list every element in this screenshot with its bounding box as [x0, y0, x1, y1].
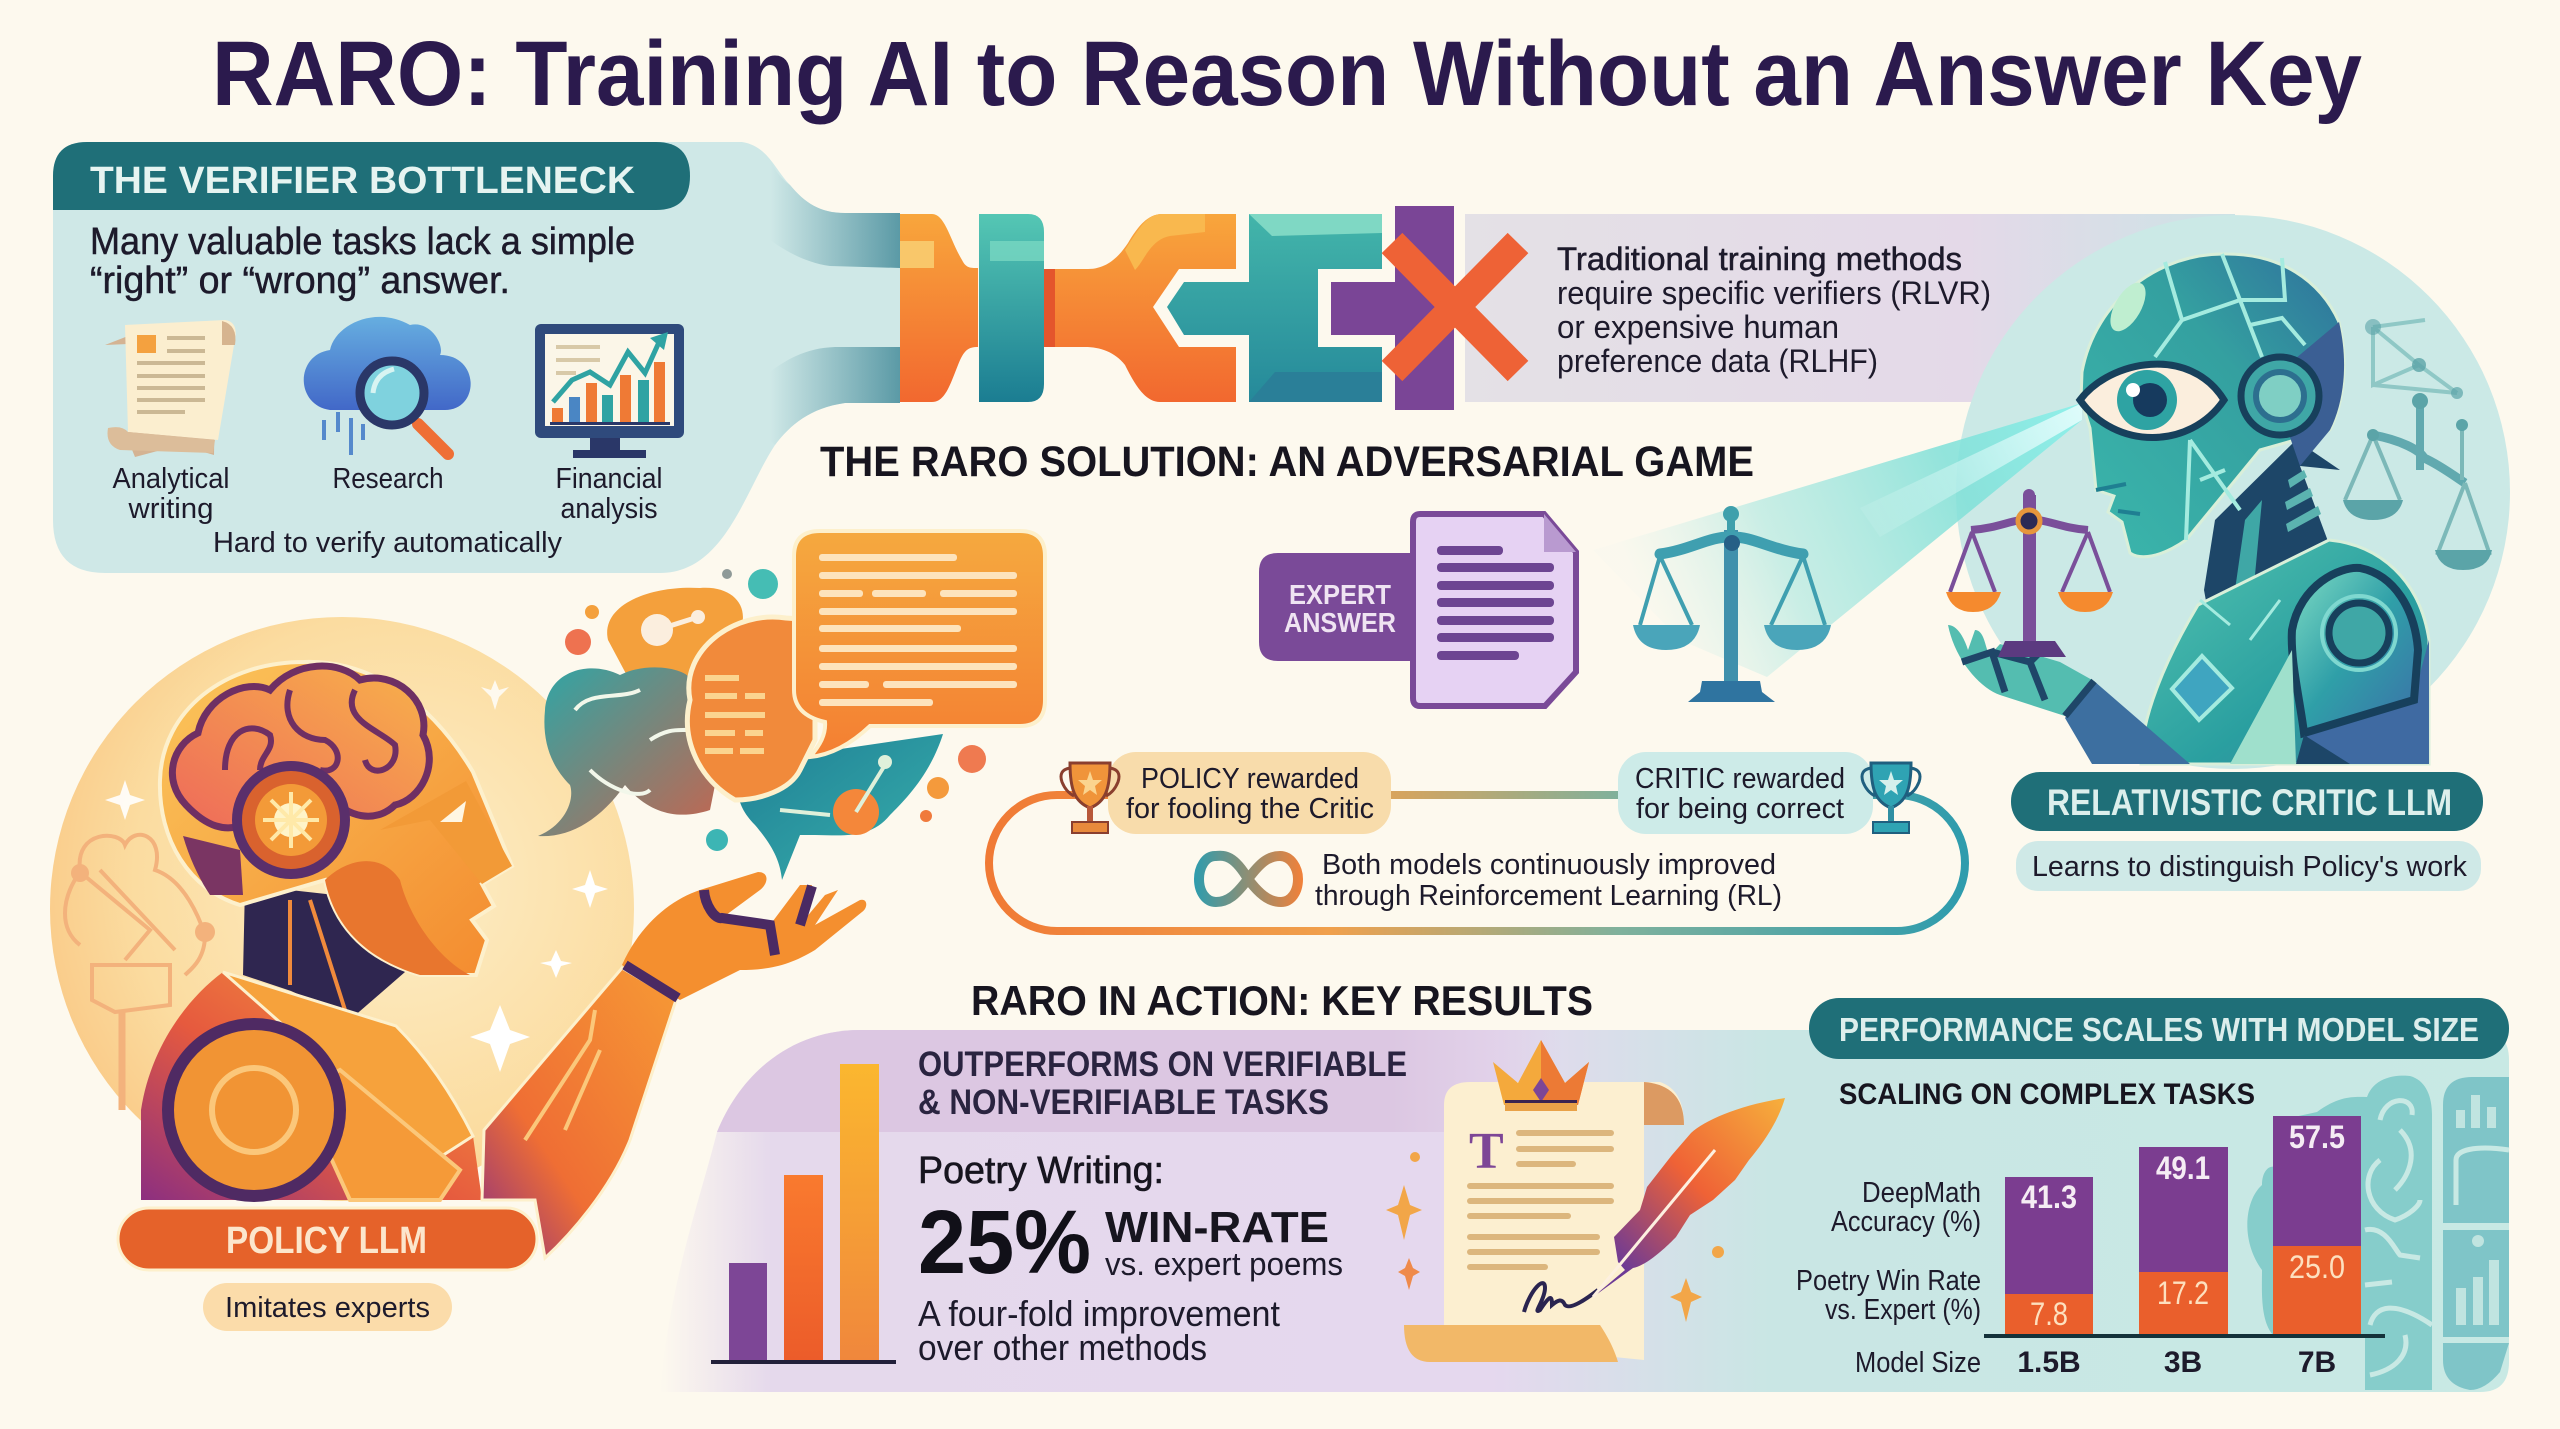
held scale: [1946, 489, 2113, 657]
critic reward pill: CRITIC rewarded: [1635, 763, 1845, 795]
model sizes: 1.5B: [2017, 1346, 2081, 1379]
axis labels: Model Size: [1855, 1347, 1981, 1379]
panel background with pipes: [53, 142, 900, 573]
hand: [622, 872, 866, 1000]
label: policy LLM: POLICY LLM: [226, 1220, 427, 1262]
faint network sketch: [65, 835, 205, 1110]
beam from critic eye: [1593, 403, 2082, 677]
model sizes: 3B: [2164, 1346, 2202, 1379]
label: financial: Financial: [556, 463, 662, 495]
bar 3B: 17.2: [2157, 1275, 2209, 1311]
stat label: WIN-RATE: [1105, 1203, 1329, 1252]
icon: balance scale: [1633, 506, 1831, 702]
label: research: Research: [332, 463, 444, 495]
text: traditional training methods: or expensive human: [1557, 309, 1839, 345]
subheading: [918, 1045, 1407, 1122]
sun circle: [50, 617, 634, 1201]
label: relativistic critic LLM: RELATIVISTIC CRITIC LLM: [2047, 782, 2452, 823]
improvement note: over other methods: [918, 1327, 1207, 1368]
subheading: OUTPERFORMS ON VERIFIABLE: [918, 1045, 1407, 1084]
speech bubble: [794, 531, 1045, 757]
head: [2081, 254, 2344, 557]
bar 3B: [2139, 1147, 2228, 1336]
policy reward pill: for fooling the Critic: [1126, 793, 1374, 825]
icon: analytical writing document: [105, 320, 236, 457]
model sizes: 7B: [2298, 1346, 2336, 1379]
right teal cloud: [739, 734, 943, 880]
banner: traditional methods: [1465, 214, 2235, 402]
icon: scroll, crown and quill: [1386, 1040, 1785, 1362]
sparkles: [1386, 1152, 1724, 1322]
axis labels: Accuracy (%): [1831, 1206, 1981, 1238]
ear ring: [2241, 357, 2319, 435]
panel: key results: [660, 998, 2509, 1392]
label: analysis: analysis: [560, 493, 658, 525]
description text: Many valuable tasks lack a simple: [90, 221, 635, 263]
bar 3B: 49.1: [2156, 1150, 2210, 1186]
crown: [1493, 1040, 1589, 1105]
note: imitates experts: Imitates experts: [225, 1292, 430, 1324]
icon: financial analysis monitor: [535, 324, 684, 458]
poetry writing label: Poetry Writing:: [918, 1150, 1164, 1192]
bar 7B: 57.5: [2289, 1119, 2345, 1155]
quill: [1593, 1098, 1785, 1297]
critic reward pill: [1618, 752, 1873, 834]
character: relativistic critic LLM: [1946, 254, 2492, 764]
label: relativistic critic LLM: [2011, 772, 2483, 831]
chart subheading: SCALING ON COMPLEX TASKS: [1839, 1078, 2255, 1111]
text: traditional training methods: require specific verifiers (RLVR): [1557, 275, 1991, 311]
lower pipe shading: [755, 347, 900, 445]
axis line: [1984, 1334, 2385, 1338]
bar 1.5B: 7.8: [2030, 1296, 2068, 1332]
ear ring: [237, 766, 345, 874]
heading: raro in action: RARO IN ACTION: KEY RESULTS: [971, 977, 1593, 1024]
stat: 25%: 25%: [918, 1193, 1091, 1293]
body: [2141, 540, 2429, 764]
continuous improvement text: Both models continuously improved: [1322, 849, 1776, 881]
improvement note: A four-fold improvement: [918, 1293, 1280, 1334]
diagram: reward loop: [989, 752, 1965, 931]
arm: [482, 968, 676, 1258]
decorative: brain and circuit pattern: [2247, 1076, 2509, 1390]
chart header: PERFORMANCE SCALES WITH MODEL SIZE: [1839, 1011, 2479, 1048]
panel background: [660, 1030, 2509, 1392]
icon: orange trophy: [1061, 763, 1119, 833]
bar 7B: 25.0: [2289, 1249, 2345, 1285]
title: RARO: Training AI to Reason Without an Answer Key: [212, 23, 2362, 125]
text: traditional training methods: [1557, 241, 1991, 379]
critic reward pill: for being correct: [1636, 793, 1844, 825]
neck: [2204, 440, 2340, 612]
note: learns to distinguish: [2016, 841, 2481, 891]
axis labels: [1796, 1177, 1981, 1379]
stat sublabel: vs. expert poems: [1105, 1246, 1343, 1282]
brain: [172, 666, 429, 828]
description text line 2: “right” or “wrong” answer.: [90, 260, 510, 302]
axis labels: vs. Expert (%): [1825, 1294, 1981, 1326]
note: imitates experts: [203, 1283, 452, 1331]
icon: teal trophy: [1862, 763, 1920, 833]
improvement note: [918, 1293, 1280, 1368]
answer label: ANSWER: [1284, 607, 1396, 638]
label: policy LLM: [118, 1208, 537, 1270]
stacked bar chart: model size scaling: [1796, 1116, 2385, 1379]
text: traditional training methods: Traditional training methods: [1557, 241, 1962, 277]
body: [141, 972, 482, 1200]
model sizes: [2017, 1346, 2336, 1379]
bar 1.5B: 41.3: [2021, 1179, 2077, 1215]
dots: [722, 569, 732, 579]
icon: research cloud with magnifier: [304, 317, 471, 455]
neck: [243, 885, 405, 1018]
panel: critic circle: [1956, 215, 2510, 769]
middle orange cloud: [687, 617, 815, 800]
eye: [2080, 364, 2224, 438]
icon: infinity loop: [1199, 856, 1298, 902]
top orange cloud: [607, 588, 743, 700]
bar chart: poetry win rates: [711, 1064, 896, 1364]
bar 7B: [2273, 1116, 2361, 1336]
axis labels: DeepMath: [1862, 1177, 1981, 1209]
heading: the raro solution: THE RARO SOLUTION: AN ADVERSARIAL GAME: [820, 438, 1754, 486]
label: writing: writing: [127, 493, 214, 525]
thought bubbles: [538, 531, 1045, 880]
subheading: & NON-VERIFIABLE TASKS: [918, 1083, 1329, 1122]
text: traditional training methods: preference data (RLHF): [1557, 343, 1878, 379]
upper pipe shading: [753, 160, 900, 268]
head: [160, 662, 512, 975]
loop path: [989, 795, 1965, 931]
panel: the verifier bottleneck: [53, 142, 900, 573]
label: analytical writing: Analytical: [112, 463, 230, 495]
left teal cloud: [538, 667, 720, 836]
axis labels: Poetry Win Rate: [1796, 1265, 1981, 1297]
icon: expert answer document: [1259, 514, 1576, 706]
stars: [105, 680, 608, 1072]
mouth and nose: [2096, 484, 2140, 514]
character: policy LLM: [50, 617, 866, 1258]
note: learns to distinguish: Learns to distinguish Policy's work: [2032, 851, 2467, 883]
header bar: [53, 142, 690, 210]
policy reward pill: POLICY rewarded: [1141, 763, 1359, 795]
signature: [1524, 1283, 1598, 1312]
bar 1.5B: [2005, 1177, 2093, 1336]
header text: THE VERIFIER BOTTLENECK: [90, 160, 636, 202]
policy reward pill: [1108, 752, 1391, 834]
chart header: [1809, 998, 2509, 1059]
forearm and hand: [2065, 681, 2190, 764]
serif letter: T: [1469, 1123, 1504, 1180]
continuous improvement text: [1315, 849, 1782, 912]
header strip: [717, 1030, 1560, 1132]
caption: Hard to verify automatically: [213, 527, 562, 559]
expert answer label: EXPERT: [1289, 579, 1391, 610]
continuous improvement text: through Reinforcement Learning (RL): [1315, 880, 1782, 912]
background network and scale: [2345, 320, 2490, 555]
icon: connected pipes and blocked verifier: [900, 206, 1518, 410]
